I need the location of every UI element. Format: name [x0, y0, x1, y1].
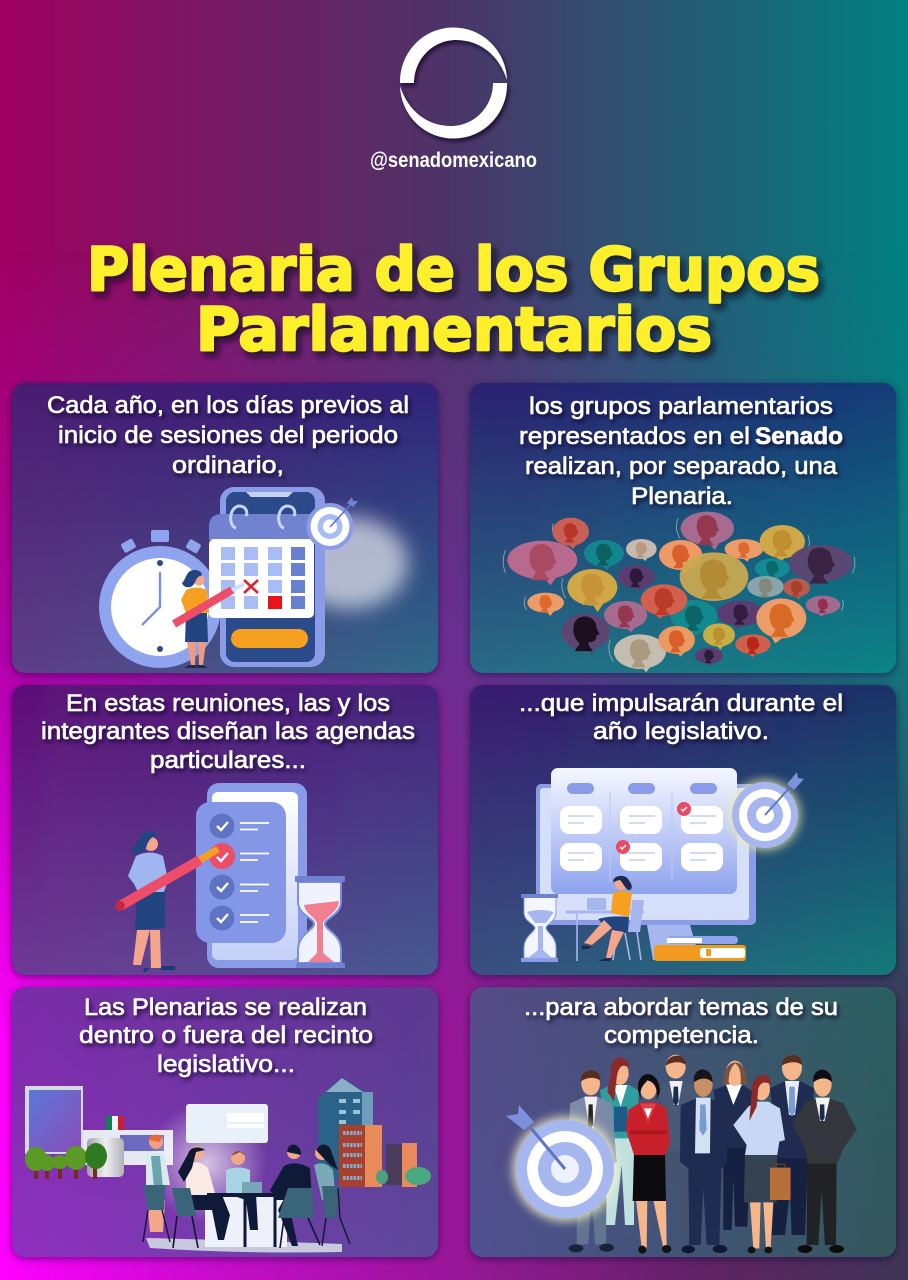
person: man in gray	[568, 1070, 617, 1252]
panel text: Cada año, en los días previos al	[47, 392, 409, 419]
icon: trees	[25, 1143, 107, 1179]
table with laptop	[207, 1182, 287, 1247]
panel text	[524, 994, 838, 1049]
icon: calendar phone	[209, 487, 325, 667]
panel text: competencia.	[604, 1022, 759, 1049]
panel text: los grupos parlamentarios	[529, 393, 833, 420]
standing woman right	[314, 1144, 350, 1246]
icon: senate building	[25, 1086, 173, 1177]
panel text	[519, 393, 843, 510]
panel text: integrantes diseñan las agendas	[41, 718, 415, 745]
icon: books	[654, 936, 746, 961]
icon: glow and presentation board	[147, 1103, 268, 1223]
panel text: inicio de sesiones del periodo	[58, 422, 398, 449]
panel text: ...para abordar temas de su	[524, 994, 838, 1021]
panel text: Plenaria.	[631, 483, 733, 510]
panel text: Senado	[755, 423, 843, 450]
panel: reuniones (checklist)	[12, 685, 438, 975]
panel: cada año (calendar)	[12, 383, 438, 673]
panel text	[519, 690, 843, 745]
person: man back right	[770, 1055, 814, 1235]
panel text	[79, 994, 373, 1078]
seated woman center	[226, 1151, 258, 1230]
panel text: Las Plenarias se realizan	[84, 994, 367, 1021]
icon: meeting people	[143, 1135, 350, 1252]
panel text: legislativo...	[157, 1051, 295, 1078]
icon: city buildings	[318, 1078, 431, 1187]
icon: woman at desk	[566, 876, 644, 961]
person: woman in red	[626, 1074, 671, 1254]
icon: woman with pencil	[115, 831, 218, 972]
title	[87, 235, 820, 365]
title: Parlamentarios	[196, 295, 712, 365]
person: man dark suit	[792, 1070, 857, 1253]
icon: stopwatch	[99, 530, 221, 668]
title: Plenaria de los Grupos	[87, 235, 820, 305]
panel text: representados en el	[519, 423, 750, 450]
icon: glow behind calendar	[292, 517, 408, 609]
chart: speech bubbles with head silhouettes	[503, 512, 855, 672]
panel text: En estas reuniones, las y los	[66, 690, 390, 717]
panel text: particulares...	[150, 747, 306, 774]
icon: team of professionals	[568, 1055, 857, 1254]
icon: hourglass	[521, 894, 558, 962]
icon: monitor	[536, 768, 756, 960]
icon: target with glow	[506, 1105, 617, 1221]
person: man navy	[680, 1069, 727, 1253]
panel text: ordinario,	[172, 452, 284, 479]
icon: checklist board	[196, 783, 307, 968]
icon: woman with pencil	[174, 570, 244, 668]
standing woman left	[143, 1135, 170, 1242]
panel text: año legislativo.	[593, 718, 769, 745]
person: woman teal	[600, 1057, 639, 1225]
seated woman black hair	[172, 1146, 230, 1248]
panel text: dentro o fuera del recinto	[79, 1022, 373, 1049]
panel: año legislativo (dashboard)	[470, 685, 896, 975]
icon: hourglass	[295, 876, 345, 968]
person: woman back	[713, 1061, 755, 1230]
logo: ring mark	[400, 27, 507, 139]
panel text	[47, 392, 409, 479]
panel text	[41, 690, 415, 774]
panel text: ...que impulsarán durante el	[519, 690, 843, 717]
panel: grupos parlamentarios (speech bubbles)	[470, 383, 896, 673]
handle: @senadomexicano: @senadomexicano	[370, 149, 537, 172]
person: man back center	[653, 1055, 697, 1233]
panel: temas de competencia (team)	[470, 987, 896, 1257]
panel text: realizan, por separado, una	[525, 453, 838, 480]
person: woman light shirt	[733, 1075, 791, 1253]
panel: plenarias recinto (meeting)	[12, 987, 438, 1257]
seated man in black	[270, 1145, 320, 1248]
icon: target	[306, 497, 358, 550]
icon: target	[730, 772, 804, 850]
